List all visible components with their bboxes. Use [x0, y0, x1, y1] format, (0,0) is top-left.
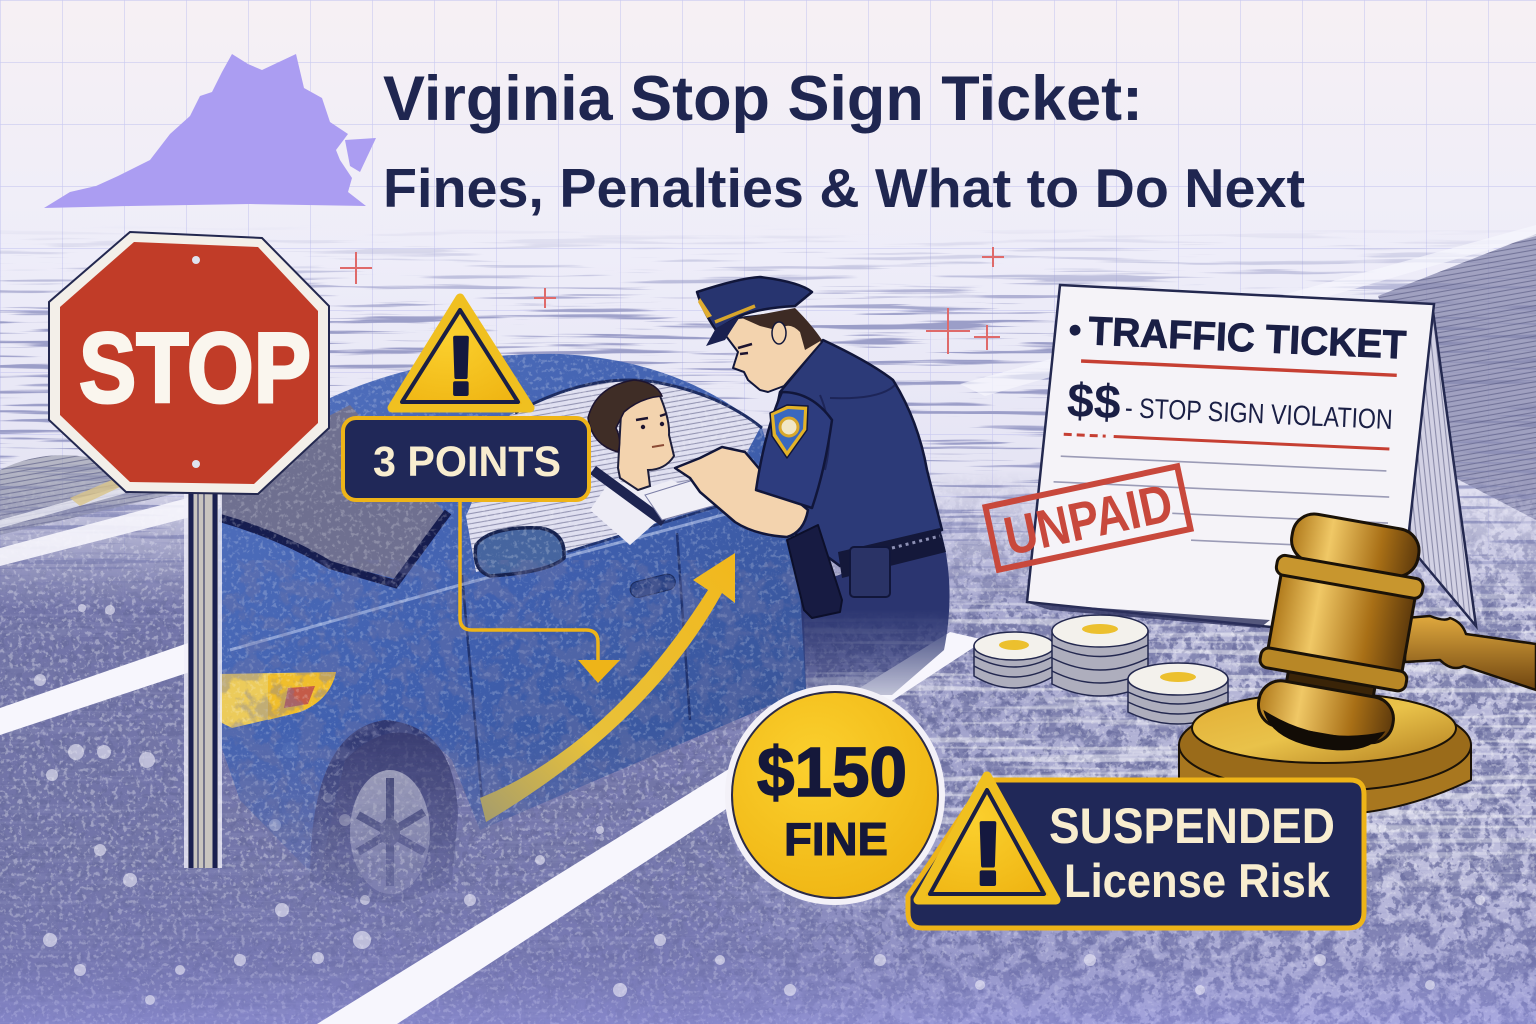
stop text: STOP	[79, 312, 311, 423]
ticket text: TRAFFIC TICKET	[1087, 309, 1407, 368]
officer legs	[800, 535, 950, 695]
door handle	[630, 574, 676, 598]
belt pouch	[850, 547, 890, 597]
side mirror	[475, 528, 564, 576]
officer ear	[772, 322, 786, 344]
badge	[343, 418, 589, 500]
sparkles	[340, 247, 1004, 354]
officer neck and head	[726, 312, 822, 392]
ticket sheet	[1027, 285, 1434, 630]
badge	[908, 780, 1364, 928]
warning triangle: !	[973, 804, 1003, 903]
connector arrow to door	[460, 500, 598, 662]
round road speckles	[34, 604, 1485, 1005]
tail light	[220, 672, 336, 728]
officer sleeve	[756, 392, 832, 508]
car body	[205, 354, 806, 880]
sign post	[184, 488, 222, 868]
title	[383, 64, 1305, 219]
stop sign	[49, 232, 329, 868]
road surface with mottled texture	[0, 442, 1536, 1024]
coin stack middle	[1052, 615, 1148, 696]
cap visor	[706, 316, 740, 346]
duty belt	[838, 528, 946, 578]
ticket text: $$	[1066, 374, 1122, 430]
octagon	[49, 232, 329, 494]
car wheel	[310, 720, 458, 902]
suspended license callout: License Risk	[1064, 854, 1331, 907]
gavel	[1179, 509, 1536, 815]
car door lines	[462, 505, 722, 800]
fine coin: $150	[757, 733, 907, 811]
officer arm and hand	[675, 447, 808, 537]
far landscape with sketched streaks	[0, 234, 1536, 589]
gavel base	[1179, 745, 1471, 815]
wiper line	[220, 512, 448, 584]
officer eye	[738, 344, 752, 354]
holster	[787, 525, 842, 618]
car windshield	[220, 405, 447, 580]
driver shirt	[590, 478, 692, 545]
unpaid stamp: UNPAID	[999, 473, 1178, 567]
coin stacks	[974, 615, 1228, 724]
suspended license callout	[908, 776, 1364, 928]
officer torso	[760, 340, 942, 566]
seatbelt	[593, 470, 664, 522]
road markings	[0, 225, 1536, 1024]
callout: 3 points: 3 POINTS	[373, 438, 561, 486]
ticket text: - STOP SIGN VIOLATION	[1124, 392, 1393, 435]
Virginia state silhouette	[44, 54, 376, 208]
police officer	[675, 277, 950, 695]
driver hair	[588, 380, 662, 452]
warning triangle	[918, 776, 1056, 903]
cap band	[715, 306, 755, 322]
ticket rear fold	[1404, 304, 1476, 626]
ticket text	[1051, 308, 1407, 549]
gavel head	[1247, 509, 1432, 761]
ticket shadow	[1028, 603, 1270, 628]
driver	[588, 380, 716, 545]
traffic ticket	[985, 285, 1476, 630]
coin stack right	[1128, 663, 1228, 724]
ticket text: •	[1067, 309, 1083, 352]
warning triangle	[392, 298, 530, 412]
officer hair	[742, 308, 822, 350]
officer cap	[697, 277, 812, 330]
title: Fines, Penalties & What to Do Next	[383, 157, 1305, 219]
yellow trend arrow	[480, 553, 735, 822]
fine coin: FINE	[784, 813, 888, 865]
car with driver	[200, 350, 810, 902]
fine coin	[725, 685, 945, 905]
speckle overlay on car	[200, 350, 810, 880]
callout: 3 points	[343, 298, 620, 683]
gavel handle	[1405, 616, 1536, 690]
driver neck and face	[618, 395, 674, 490]
officer shoulder badge	[770, 405, 808, 458]
coin stack left	[974, 632, 1054, 688]
warning triangle: !	[447, 321, 475, 412]
ticket paper	[645, 478, 716, 520]
text: SUSPENDED	[1049, 798, 1335, 854]
title: Virginia Stop Sign Ticket:	[383, 64, 1143, 134]
side window	[466, 380, 760, 572]
